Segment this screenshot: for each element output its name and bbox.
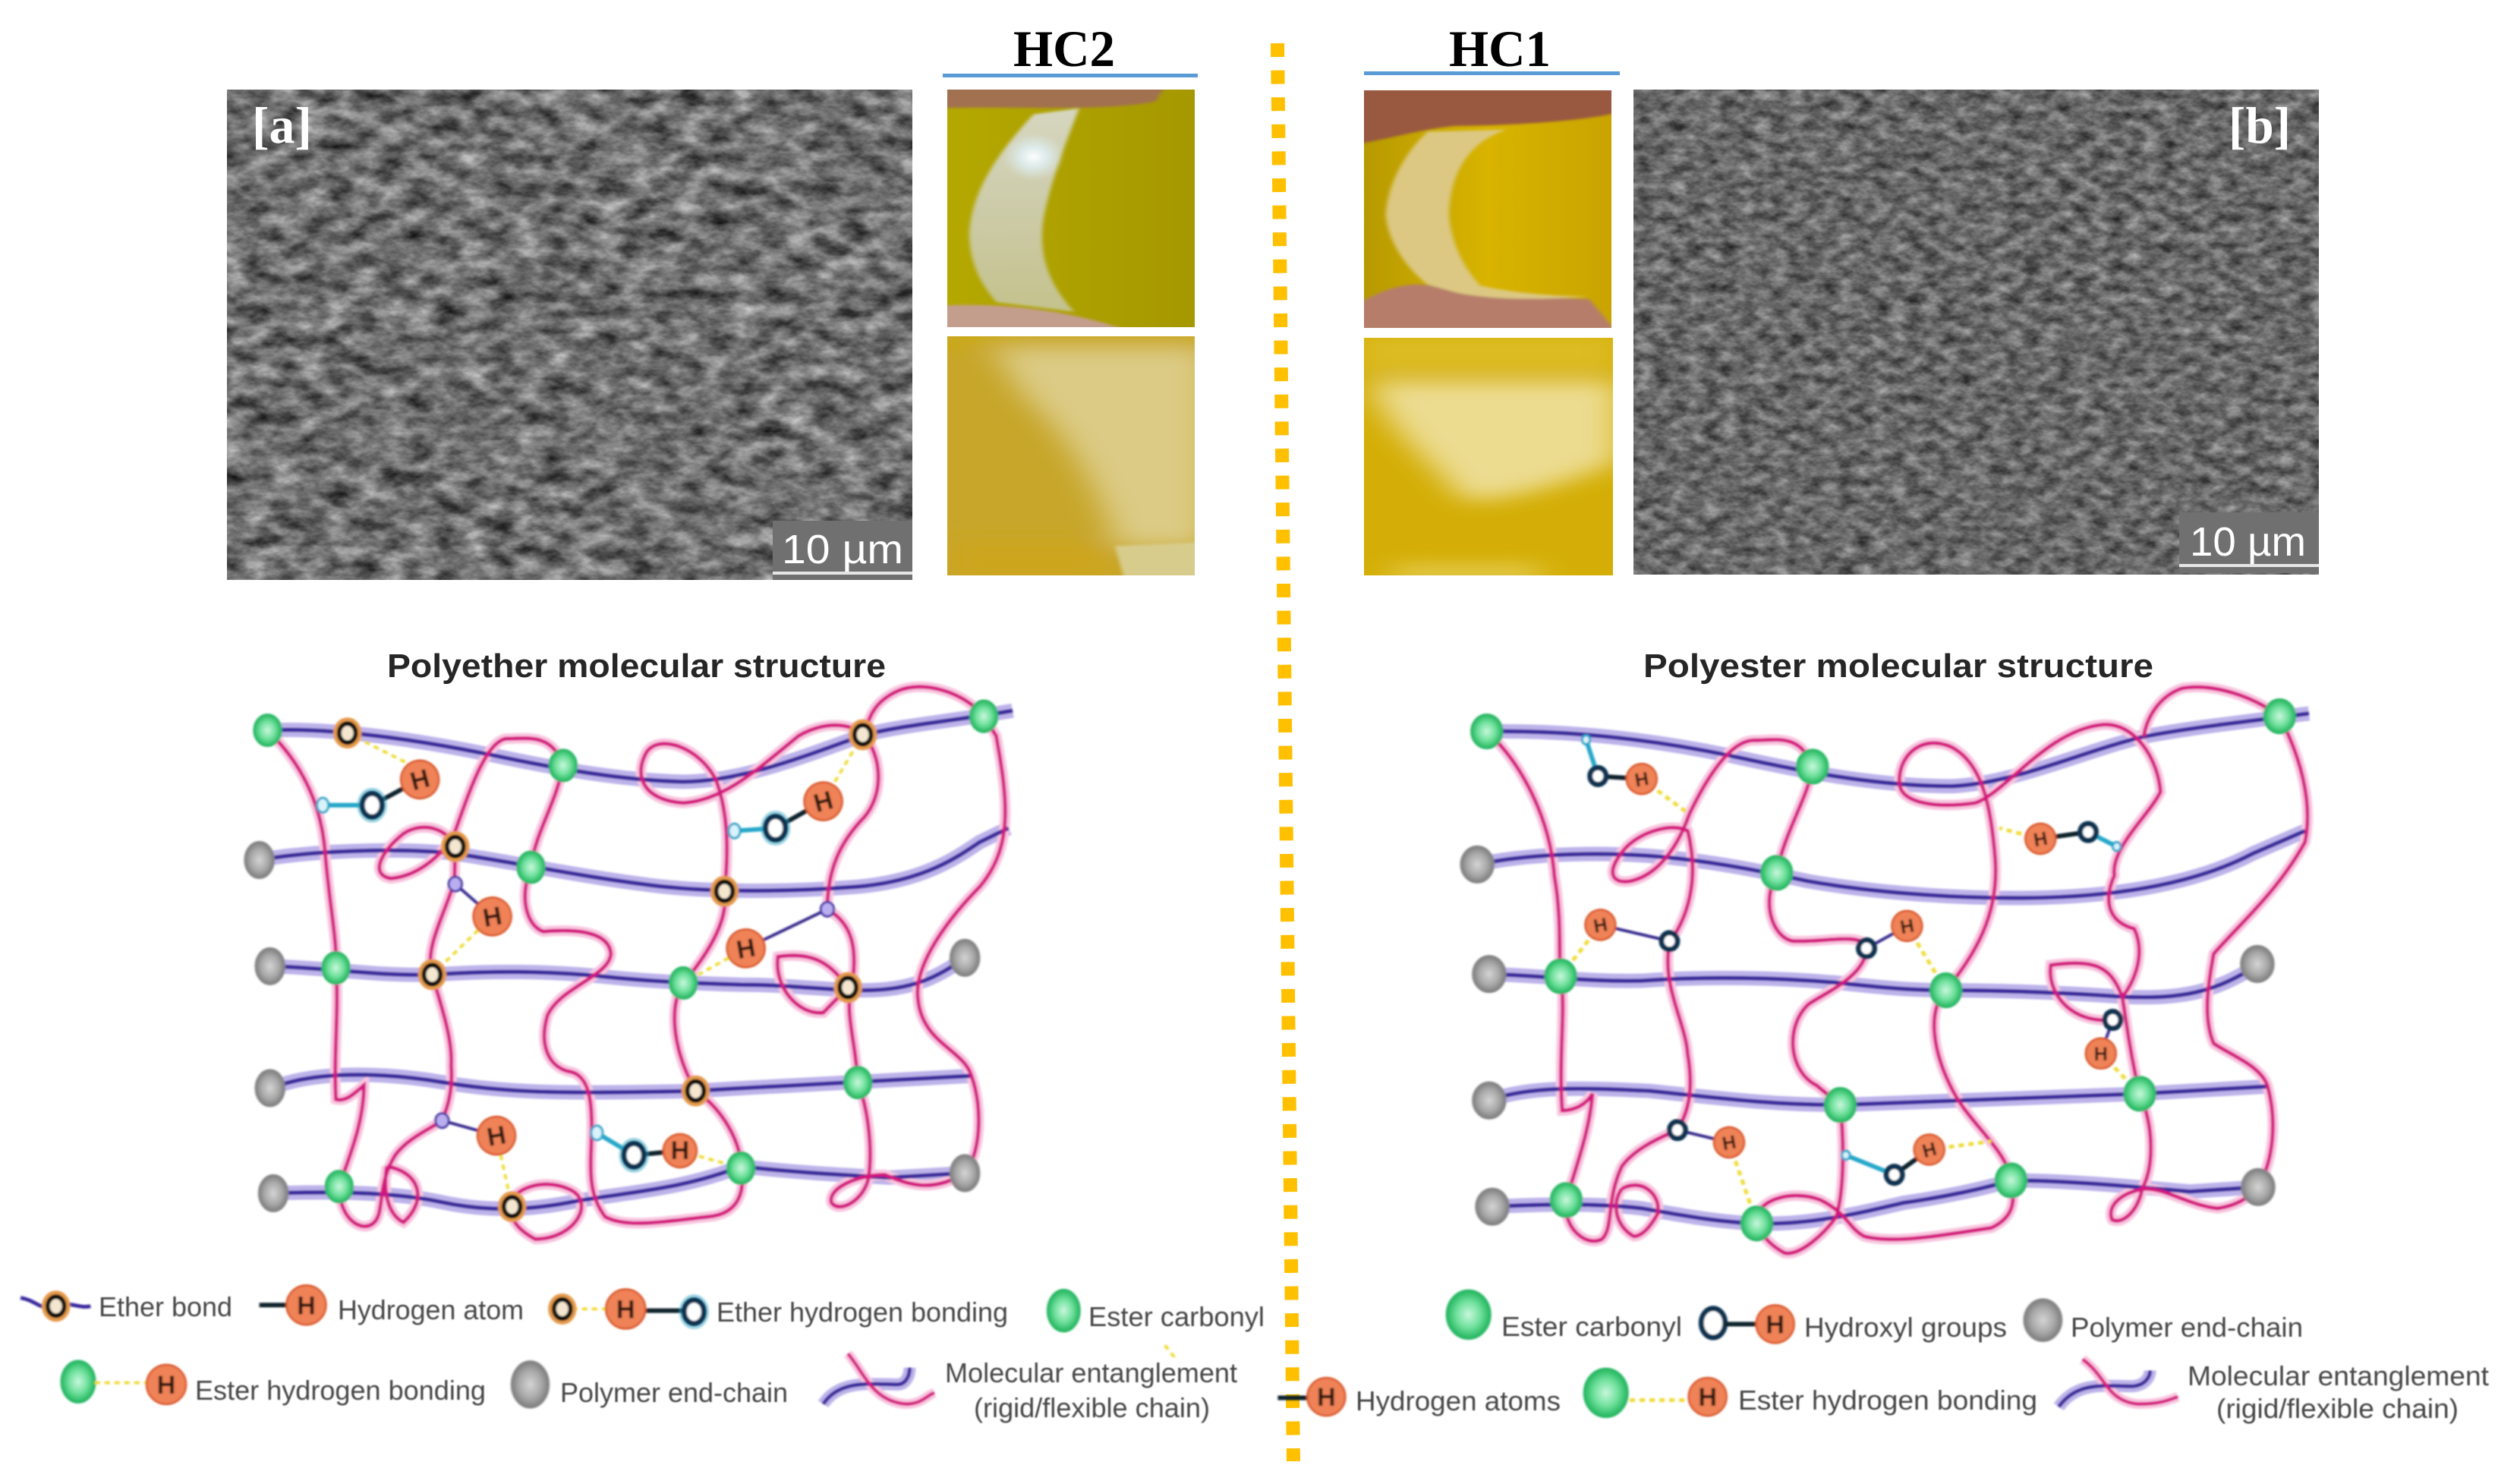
hydrogen atoms: H — [811, 786, 836, 818]
hydrogen atoms: H — [1721, 1132, 1737, 1155]
panel label b: [b] — [2229, 96, 2291, 154]
ester carbonyl nodes — [254, 700, 998, 1202]
scale bar a: 10 µm — [782, 527, 903, 572]
scale bar b: 10 µm — [2190, 519, 2306, 565]
hydrogen atoms: H — [2094, 1044, 2108, 1065]
legend labels: Hydroxyl groups — [1804, 1312, 2007, 1343]
hydrogen atoms: H — [734, 933, 758, 965]
legend labels: (rigid/flexible chain) — [974, 1392, 1210, 1423]
hydrogen atoms: H — [1592, 914, 1609, 937]
hydrogen atoms: H — [485, 1120, 509, 1152]
ether bond nodes — [336, 720, 874, 1220]
title: polyester: Polyester molecular structure — [1643, 647, 2153, 685]
polymer end-chain nodes — [244, 842, 980, 1211]
hydrogen atoms: H — [480, 901, 504, 933]
hydrogen atoms — [397, 756, 846, 1167]
scale bar a — [773, 521, 912, 580]
hydrogen atoms: H — [2032, 828, 2049, 851]
bonds — [323, 733, 863, 1207]
legend labels: Polymer end-chain — [560, 1377, 788, 1408]
diagram: polyether network — [244, 687, 1013, 1239]
heading HC2: HC2 — [1013, 20, 1115, 77]
legend labels — [99, 1291, 1265, 1423]
legend icons: H — [1317, 1383, 1336, 1412]
legend labels: Ester hydrogen bonding — [195, 1375, 486, 1406]
legend icons: H — [1766, 1310, 1785, 1339]
SEM image panel a — [227, 90, 912, 580]
legend labels: Molecular entanglement — [2188, 1360, 2489, 1391]
panel label a: [a] — [252, 96, 312, 154]
hydrogen atoms: H — [1920, 1139, 1939, 1162]
hydrogen atoms: H — [1898, 915, 1916, 938]
legend labels: Polymer end-chain — [2071, 1312, 2303, 1343]
legend labels: Hydrogen atoms — [1356, 1385, 1561, 1416]
heading HC1 — [1364, 20, 1620, 77]
legend: polyether — [20, 1285, 1265, 1423]
legend labels: Ether hydrogen bonding — [717, 1297, 1008, 1328]
legend icons: H — [157, 1371, 175, 1400]
legend icons — [1277, 1290, 2178, 1417]
ester carbonyl nodes — [1471, 699, 2295, 1241]
polymer end-chain nodes — [1460, 846, 2275, 1225]
legend labels: (rigid/flexible chain) — [2216, 1393, 2459, 1424]
photo: HC1 film close-up — [1358, 333, 1618, 579]
heading HC1: HC1 — [1449, 20, 1551, 77]
legend icons: H — [1698, 1383, 1717, 1412]
hydrogen atoms: H — [1633, 768, 1650, 791]
legend icons — [20, 1285, 1175, 1408]
legend labels — [1356, 1311, 2489, 1424]
hydrogen atoms — [1583, 761, 2116, 1168]
diagram: polyester network — [1460, 687, 2309, 1253]
legend labels: Ether bond — [99, 1291, 232, 1322]
hydrogen atoms: H — [671, 1136, 689, 1165]
photo: HC2 bent film — [935, 85, 1195, 333]
hydroxyl oxygen and small nodes — [1582, 736, 2121, 1183]
hydroxyl oxygen and small nodes — [317, 791, 834, 1169]
divider: orange dotted line — [1277, 43, 1293, 1461]
legend labels: Ester carbonyl — [1088, 1301, 1265, 1332]
legend labels: Molecular entanglement — [945, 1357, 1237, 1388]
legend labels: Ester hydrogen bonding — [1738, 1385, 2037, 1416]
legend labels: Hydrogen atom — [338, 1294, 524, 1325]
photo: HC2 film close-up — [947, 336, 1195, 575]
SEM image panel b — [1633, 90, 2319, 575]
scale bar b — [2179, 512, 2319, 573]
heading HC2 — [943, 20, 1198, 77]
legend icons: H — [297, 1291, 316, 1320]
photo: HC1 bent film — [1358, 87, 1618, 333]
title: polyether: Polyether molecular structure — [387, 647, 886, 685]
bonds — [1561, 740, 2140, 1224]
hydrogen atoms: H — [408, 764, 433, 796]
legend labels: Ester carbonyl — [1501, 1311, 1682, 1342]
legend icons: H — [616, 1295, 635, 1324]
legend: polyester — [1277, 1290, 2489, 1424]
